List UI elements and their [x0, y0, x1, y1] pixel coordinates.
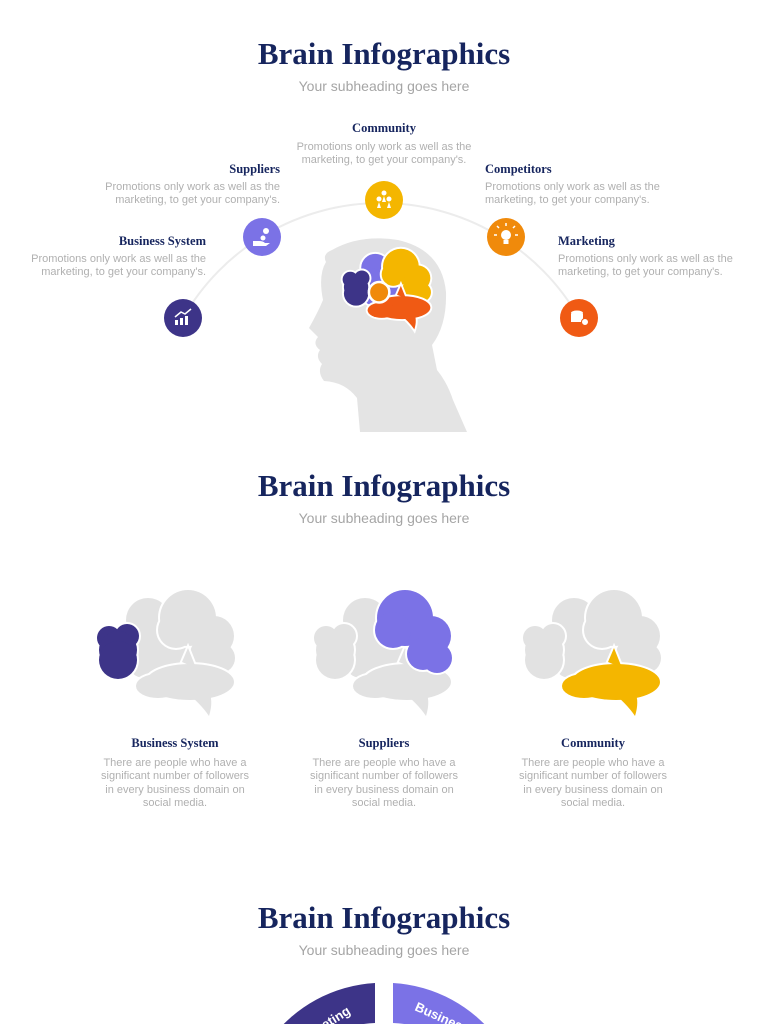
text: business system: Business System — [119, 234, 207, 248]
text: community card: in every business domain on — [523, 784, 663, 796]
text: suppliers — [105, 162, 280, 206]
text: community — [297, 121, 471, 166]
text: community: Community — [352, 121, 417, 135]
text: suppliers card: Suppliers — [359, 736, 409, 750]
text: business system: marketing, to get your company's. — [41, 266, 206, 278]
text: community card: social media. — [561, 797, 625, 809]
text: suppliers: Promotions only work as well as the — [105, 181, 280, 193]
text: competitors: marketing, to get your company's. — [485, 194, 650, 206]
text: community card: Community — [561, 736, 626, 750]
title 2: Brain Infographics — [258, 468, 510, 503]
text: community: marketing, to get your company's. — [302, 154, 466, 166]
icon: marketing — [560, 299, 598, 337]
text: suppliers: marketing, to get your company's. — [115, 194, 280, 206]
brain 3: community — [523, 590, 661, 716]
text: business system card: in every business domain on — [105, 784, 245, 796]
icon: business system — [164, 299, 202, 337]
icon: community — [365, 181, 403, 219]
text: competitors: Promotions only work as well as the — [485, 181, 660, 193]
subheading 3: Your subheading goes here — [299, 942, 470, 958]
head silhouette — [309, 238, 467, 432]
text: business system card — [101, 736, 249, 809]
text: suppliers card: significant number of followers — [310, 770, 458, 782]
text: suppliers: Suppliers — [229, 162, 280, 176]
text: business system: Promotions only work as well as the — [31, 253, 206, 265]
subheading 1: Your subheading goes here — [299, 78, 470, 94]
icon: competitors — [487, 218, 525, 256]
arc connector — [183, 203, 579, 318]
text: suppliers card: in every business domain on — [314, 784, 454, 796]
text: competitors: Competitors — [485, 162, 552, 176]
text: community: Promotions only work as well as the — [297, 141, 471, 153]
brain 2: suppliers — [314, 590, 452, 716]
icon: suppliers — [243, 218, 281, 256]
ring segment: business — [393, 983, 498, 1024]
text: community card: There are people who have a — [521, 757, 665, 769]
title 1: Brain Infographics — [258, 36, 510, 71]
ring segment: marketing — [270, 983, 375, 1024]
text: marketing: Promotions only work as well as the — [558, 253, 733, 265]
brain 1: business system — [97, 590, 235, 716]
text: business system card: Business System — [131, 736, 219, 750]
text: suppliers card — [310, 736, 458, 809]
text: competitors — [485, 162, 660, 206]
text: suppliers card: There are people who have a — [312, 757, 456, 769]
text: marketing — [558, 234, 733, 278]
text: business system card: significant number of followers — [101, 770, 249, 782]
head brain — [343, 249, 431, 329]
text: marketing: marketing, to get your company's. — [558, 266, 723, 278]
text: marketing: Marketing — [558, 234, 616, 248]
text: community card: significant number of followers — [519, 770, 667, 782]
text: community card — [519, 736, 667, 809]
text: business system — [31, 234, 207, 278]
subheading 2: Your subheading goes here — [299, 510, 470, 526]
text: business system card: social media. — [143, 797, 207, 809]
text: suppliers card: social media. — [352, 797, 416, 809]
text: business system card: There are people who have a — [103, 757, 247, 769]
title 3: Brain Infographics — [258, 900, 510, 935]
